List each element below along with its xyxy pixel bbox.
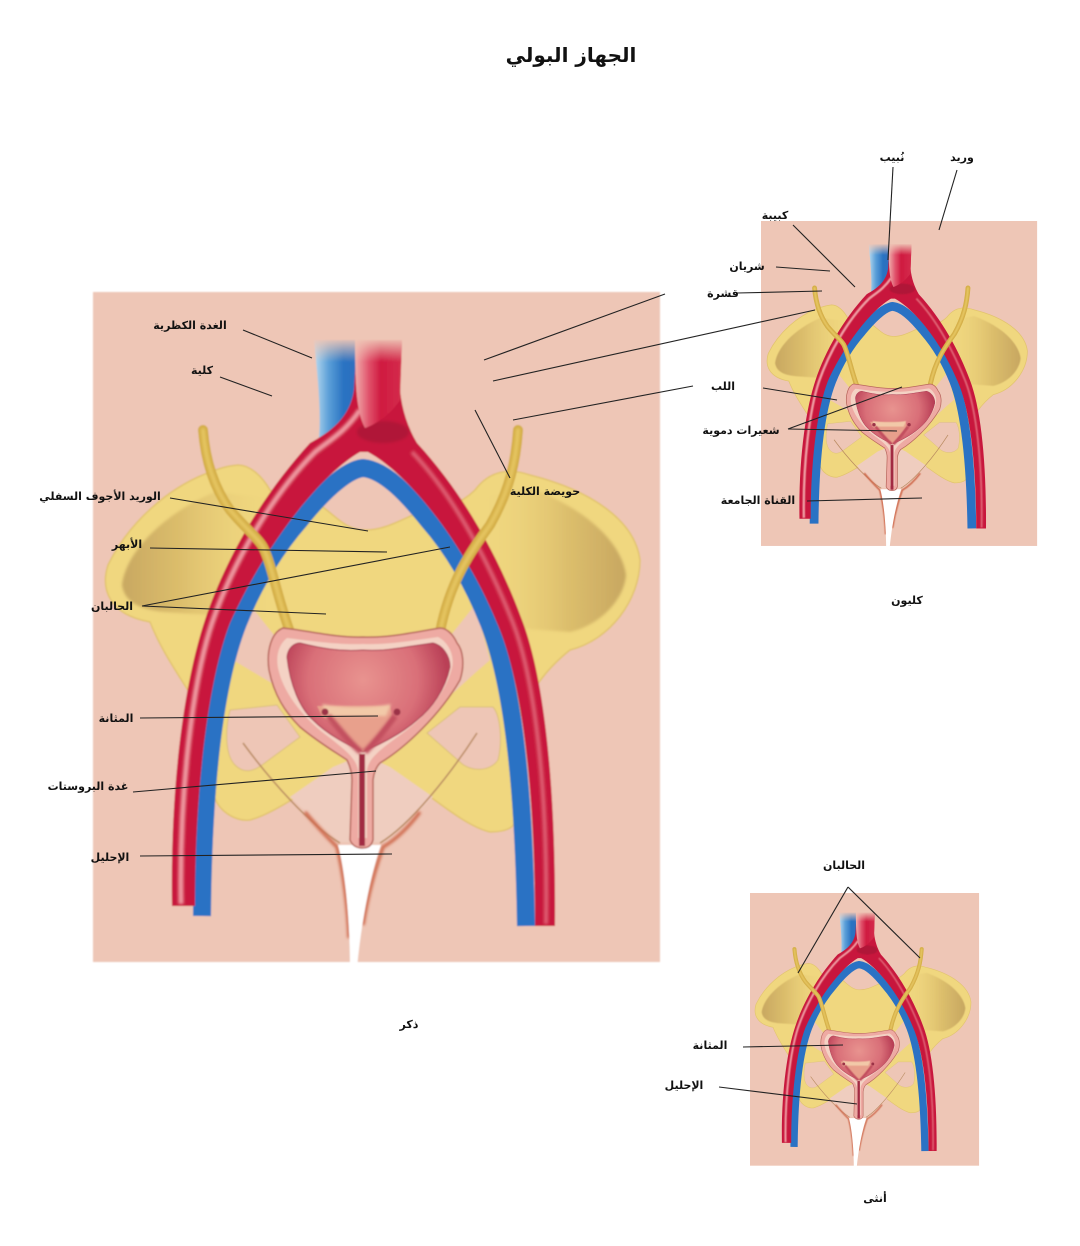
label: medulla — [513, 380, 837, 420]
panel: female diagram — [750, 893, 979, 1168]
panel: male urinary system — [93, 292, 660, 968]
panel background — [93, 292, 660, 962]
label: female bladder: المثانة — [693, 1039, 727, 1052]
white gap — [338, 845, 381, 968]
label: vein: وريد — [950, 151, 974, 164]
label: cortex: قشرة — [707, 287, 739, 300]
label: glomerulus — [762, 209, 855, 287]
panel: nephron diagram — [761, 221, 1037, 549]
label: prostate: غدة البروستات — [48, 780, 128, 793]
label: ureters: الحالبان — [91, 600, 133, 613]
caption: nephron: كليون — [891, 594, 923, 607]
lower body edges — [243, 733, 477, 938]
pelvis bone — [105, 465, 640, 842]
label: inferior vena cava: الوريد الأجوف السفلي — [39, 489, 161, 503]
caption: female: أنثى — [863, 1191, 887, 1205]
label: vein — [939, 151, 974, 230]
label: aorta: الأبهر — [111, 537, 142, 551]
label: artery — [729, 260, 830, 273]
label: collecting duct: القناة الجامعة — [721, 494, 795, 507]
bladder — [268, 628, 463, 848]
veins and arteries — [172, 336, 555, 926]
label: female ureters: الحالبان — [823, 859, 865, 872]
label: tubule: نُبيب — [880, 151, 905, 164]
label: tubule — [880, 151, 905, 260]
label: collecting duct — [721, 494, 922, 507]
label: prostate — [48, 771, 376, 793]
label: cortex — [484, 287, 822, 381]
label: bladder: المثانة — [99, 712, 133, 725]
label: ureters — [91, 547, 450, 614]
label: artery: شريان — [729, 260, 765, 273]
ureters — [203, 430, 518, 632]
label: renal pelvis — [475, 410, 580, 498]
label: female ureters — [798, 859, 920, 973]
label: female urethra — [665, 1079, 857, 1104]
label: female urethra: الإحليل — [665, 1079, 703, 1092]
label: inferior vena cava — [39, 489, 368, 531]
label: kidney — [191, 364, 272, 396]
label: adrenal gland — [153, 319, 312, 358]
label: aorta — [111, 537, 387, 552]
label: kidney: كلية — [191, 364, 214, 377]
title: الجهاز البولي — [506, 43, 636, 68]
caption: male: ذكر — [399, 1018, 419, 1031]
label: glomerulus: كبيبة — [762, 209, 789, 222]
label: capillaries: شعيرات دموية — [702, 424, 780, 437]
label: renal pelvis: حويضة الكلية — [510, 485, 580, 498]
label: medulla: اللب — [711, 380, 735, 393]
label: adrenal gland: الغدة الكظرية — [153, 319, 227, 332]
label: urethra: الإحليل — [91, 851, 129, 864]
label: capillaries — [702, 387, 902, 437]
